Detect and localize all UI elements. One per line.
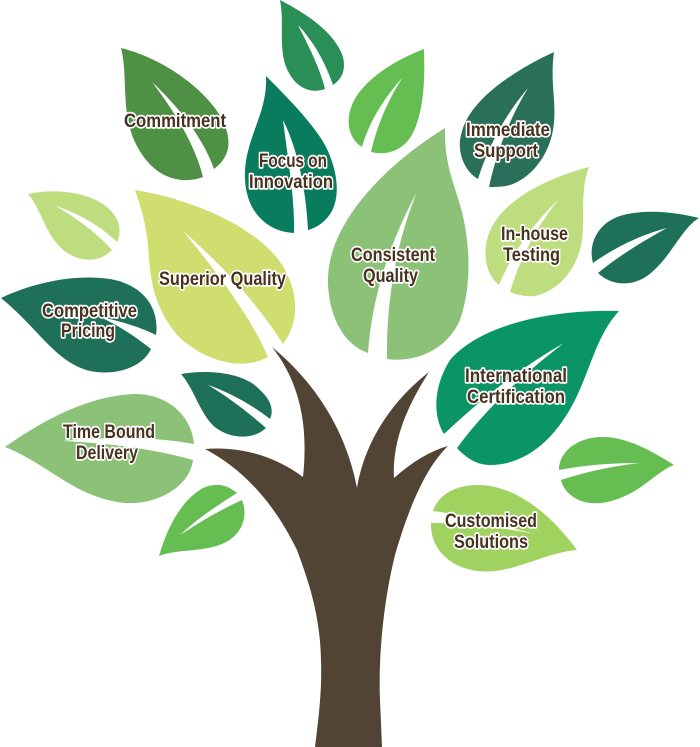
leaf: right dark (592, 212, 699, 283)
leaf shape (1, 278, 157, 372)
leaf shape (486, 167, 589, 296)
label: Testing (503, 244, 560, 266)
leaf: time bound delivery (5, 394, 194, 503)
leaf shape (436, 311, 619, 465)
leaf: competitive pricing (1, 278, 157, 372)
label: Competitive (42, 300, 137, 322)
label: Commitment (124, 110, 226, 132)
label: Pricing (61, 320, 115, 342)
label: Delivery (76, 442, 138, 464)
leaf: lower small dark (181, 372, 272, 437)
leaf: top lime (349, 49, 424, 153)
leaf: consistent quality (328, 128, 468, 360)
leaf: superior quality (135, 190, 295, 364)
leaf shape (135, 190, 295, 364)
leaf shape (245, 76, 337, 233)
label: Customised (445, 510, 537, 532)
leaf: international certification (436, 311, 619, 465)
leaf: commitment (121, 48, 228, 180)
label: In-house (501, 223, 568, 245)
leaf: customised solutions (431, 485, 577, 572)
leaf shape (121, 48, 228, 180)
leaf shape (5, 394, 194, 503)
leaf shape (328, 128, 468, 360)
label: Innovation (249, 171, 333, 193)
leaf shape (460, 52, 554, 187)
leaf: right green (559, 437, 674, 503)
tree trunk (205, 347, 448, 747)
label: International (465, 365, 567, 387)
label: Immediate (466, 119, 550, 141)
label: Support (474, 140, 538, 162)
leaf: in-house testing (486, 167, 589, 296)
leaf: top small (280, 0, 344, 91)
leaf: bottom left green (159, 485, 244, 556)
label: Time Bound (63, 421, 155, 443)
label: Consistent (351, 244, 435, 266)
leaf: immediate support (460, 52, 554, 187)
label: Superior Quality (159, 268, 286, 290)
label: Quality (363, 265, 418, 287)
label: Focus on (259, 150, 327, 172)
leaf: focus on innovation (245, 76, 337, 233)
leaf: left light (28, 191, 120, 260)
leaf shape (431, 485, 577, 572)
label: Certification (467, 386, 565, 408)
label: Solutions (454, 531, 528, 553)
